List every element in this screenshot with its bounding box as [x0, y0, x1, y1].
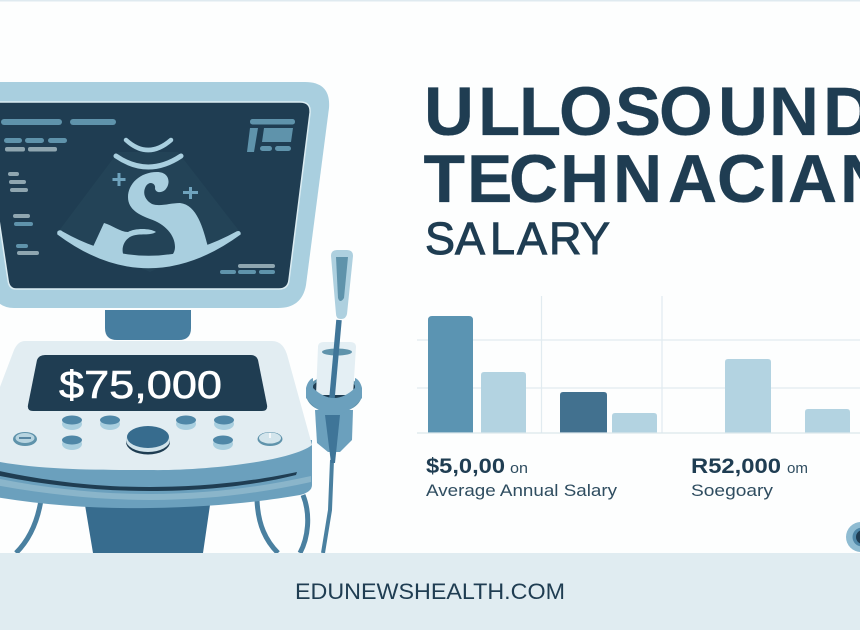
- stat: average annual salary: $5,0,00: [426, 455, 505, 478]
- stat: average annual salary: Average Annual Salary: [426, 481, 618, 500]
- monitor frame: [0, 82, 329, 308]
- stat: average annual salary: [426, 455, 618, 500]
- salary display: [28, 355, 267, 411]
- stat: second salary: R52,000: [691, 455, 781, 478]
- stat: second salary: om: [787, 460, 808, 477]
- title line 1: ULLOSOUND: [424, 73, 860, 150]
- scan image: [58, 140, 240, 268]
- subtitle: SALARY: [425, 213, 610, 264]
- footer website: EDUNEWSHEALTH.COM: [295, 579, 565, 604]
- ultrasound scan sector: [58, 152, 240, 272]
- illustration: ultrasound machine: [0, 82, 362, 553]
- stat: average annual salary: on: [510, 460, 528, 477]
- monitor neck: [105, 310, 191, 340]
- monitor screen: [0, 102, 310, 289]
- pedestal: [85, 505, 210, 553]
- footer band: [0, 553, 860, 630]
- cables: [16, 460, 332, 553]
- stat: second salary: Soegoary: [691, 481, 774, 500]
- title: [424, 73, 860, 264]
- console base: [0, 341, 312, 508]
- control buttons: [13, 416, 282, 454]
- probe and holder: [306, 250, 362, 463]
- salary display: $75,000: [59, 364, 222, 407]
- stat: second salary: [691, 455, 808, 500]
- bars: [428, 316, 850, 433]
- icon: corner badge: [846, 522, 860, 552]
- bar chart: [417, 296, 860, 433]
- screen readouts: [1, 119, 295, 274]
